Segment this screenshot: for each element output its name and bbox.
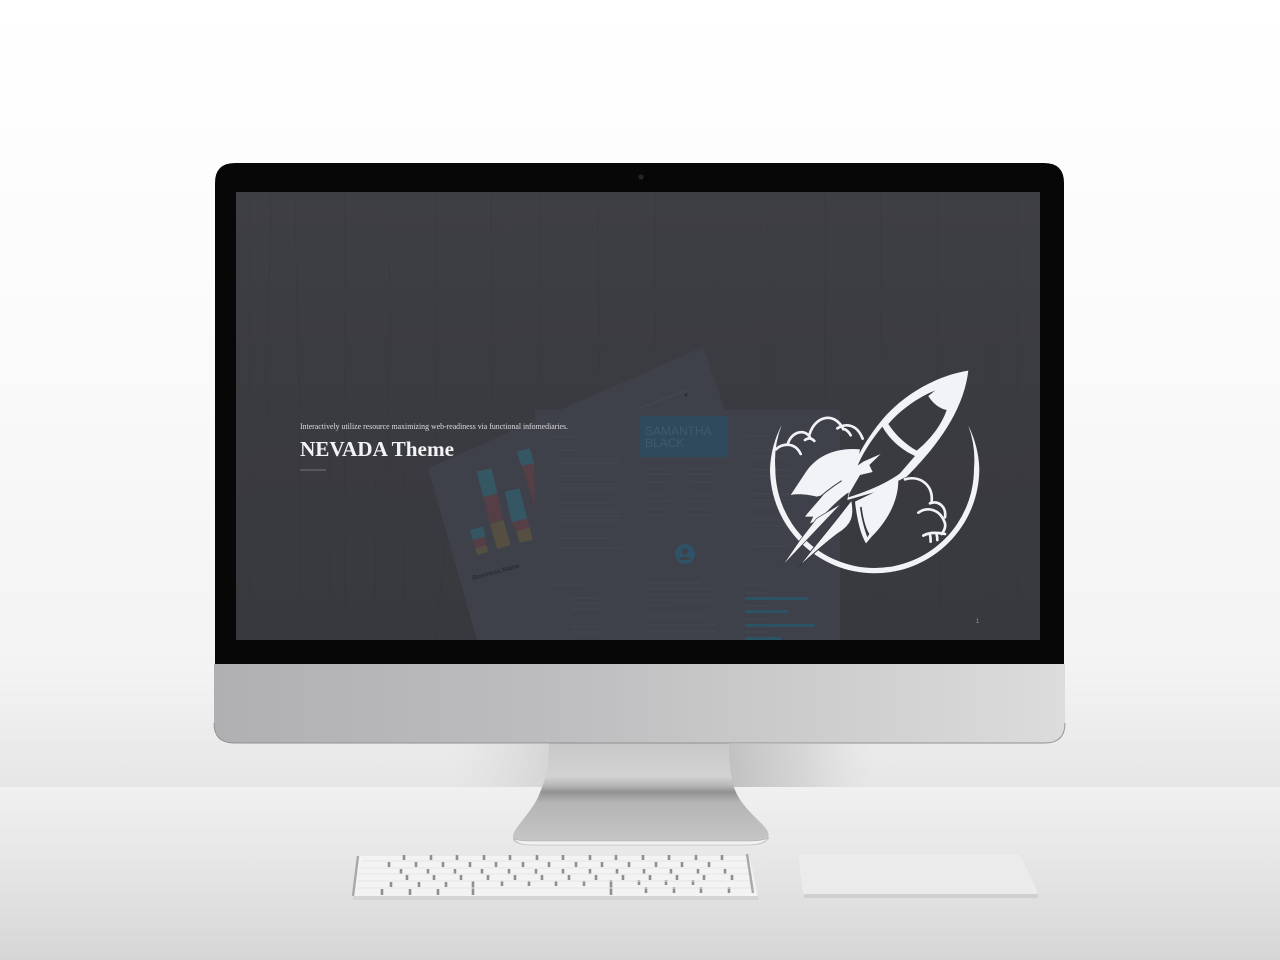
ring: [770, 425, 979, 573]
background document: tilted chart sheet: [428, 362, 724, 640]
resume name banner: BLACK: [645, 436, 684, 450]
monitor stand: [513, 743, 769, 845]
keyboard: [353, 854, 758, 900]
webcam: [638, 174, 644, 180]
monitor bezel: [215, 163, 1064, 664]
rocket hull: [847, 371, 968, 500]
background document: resume sheet: [535, 410, 840, 650]
resume text lines: [550, 436, 790, 632]
resume name banner: [640, 416, 728, 457]
key rows: [356, 861, 755, 888]
stacked bar chart: [470, 448, 535, 555]
sheet header marks: [640, 388, 692, 408]
hull window lower: [848, 427, 915, 497]
resume name banner: SAMANTHA: [645, 424, 712, 438]
icon number: 1: [910, 472, 914, 478]
screen: slide: [236, 192, 1040, 650]
trackpad: [797, 853, 1038, 898]
right fin: [855, 481, 898, 543]
page number: 1: [976, 619, 980, 625]
wood grain: [250, 192, 1018, 640]
hull window upper: [888, 391, 947, 451]
title: NEVADA Theme: [300, 437, 454, 461]
profile avatar: [675, 544, 695, 564]
monitor body: [214, 163, 1065, 743]
small inner fin: [849, 454, 881, 493]
right cloud: [905, 478, 932, 502]
chart caption: Business Name: [472, 563, 521, 582]
left fin: [791, 449, 860, 523]
skill bars: [745, 597, 815, 640]
icon: rocket in ring: [770, 371, 979, 573]
exhaust trails: [798, 500, 853, 567]
left cloud: [776, 418, 945, 542]
monitor chin: [214, 664, 1065, 743]
title underline: [300, 470, 326, 471]
tagline: Interactively utilize resource maximizing web-readiness via functional infomediaries.: [300, 421, 568, 431]
keyboard edges: [353, 854, 753, 896]
key gaps: [382, 855, 732, 895]
